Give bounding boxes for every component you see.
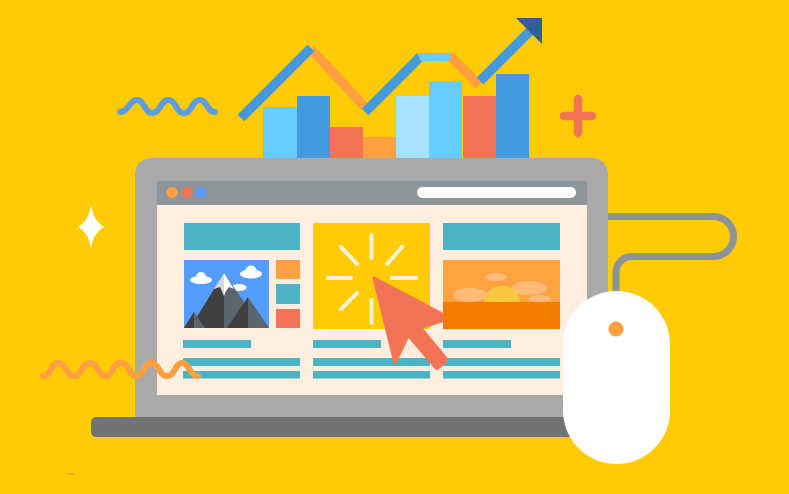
- text lines: [443, 340, 560, 378]
- sparkle icon: [78, 205, 104, 249]
- click burst: [328, 235, 416, 323]
- bar chart: [263, 74, 529, 159]
- cursor arrow: [374, 278, 445, 367]
- mouse cable: [606, 216, 734, 296]
- mouse body: [563, 291, 670, 464]
- mouse scroll dot: [608, 322, 624, 336]
- sunset picture: [443, 260, 560, 329]
- text lines: [313, 340, 430, 378]
- screen: [157, 205, 587, 395]
- right column: [443, 223, 560, 378]
- middle column: [313, 223, 430, 378]
- browser bar: [157, 181, 587, 205]
- laptop: [91, 158, 608, 437]
- blue wave: [120, 100, 215, 113]
- mountain picture: [184, 260, 269, 328]
- mouse: [563, 291, 670, 464]
- text lines: [183, 340, 300, 378]
- trend line arrow: [241, 18, 542, 118]
- plus icon: [564, 99, 592, 133]
- orange wave: [43, 363, 198, 376]
- left column: [183, 223, 300, 378]
- laptop base: [91, 417, 581, 437]
- colour swatches: [276, 260, 300, 328]
- small mark: [68, 474, 75, 475]
- laptop body: [135, 158, 608, 418]
